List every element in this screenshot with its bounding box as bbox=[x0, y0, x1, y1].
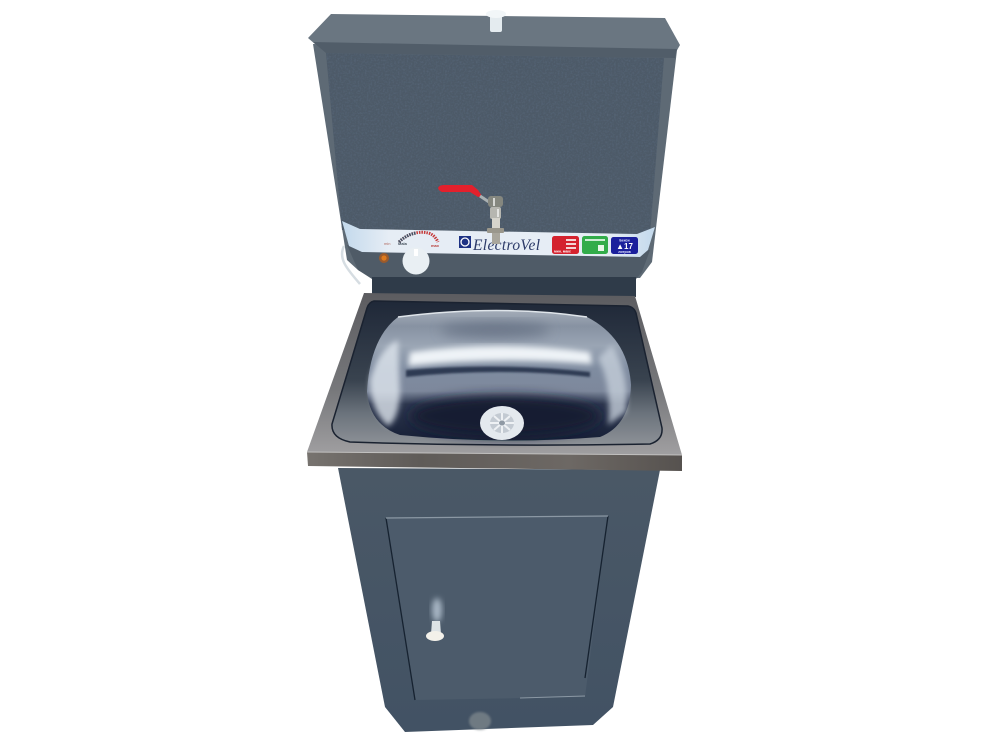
sink top rim bbox=[307, 293, 682, 455]
filler cap bbox=[486, 10, 506, 32]
red badge: мин. макс bbox=[554, 250, 571, 254]
lower panel strip bbox=[347, 245, 650, 279]
base scuff bbox=[469, 712, 491, 730]
temperature knob bbox=[402, 248, 430, 274]
temperature scale bbox=[384, 232, 440, 248]
bowl reflections bbox=[370, 310, 627, 436]
temperature scale: min bbox=[384, 241, 390, 246]
power cord bbox=[342, 246, 360, 284]
indicator lamp bbox=[379, 253, 389, 263]
red badge bbox=[552, 236, 579, 254]
blue badge: ▲17 bbox=[616, 242, 633, 251]
tank side frame bbox=[313, 44, 677, 278]
sink front edge bbox=[307, 452, 682, 471]
drain bbox=[480, 406, 524, 440]
cabinet body bbox=[338, 468, 660, 732]
temperature scale: Mala bbox=[398, 241, 408, 246]
dark neck bbox=[372, 277, 636, 297]
blue badge bbox=[611, 237, 638, 254]
door shadow lines bbox=[386, 516, 608, 700]
green badge bbox=[582, 236, 608, 254]
logo and brand name: ElectroVel bbox=[472, 237, 540, 254]
tank lid front edge bbox=[313, 42, 677, 58]
cabinet bbox=[338, 468, 660, 732]
door reflection bbox=[432, 598, 442, 622]
temperature scale: max bbox=[431, 243, 440, 248]
tank lid bbox=[308, 14, 680, 52]
sink bbox=[307, 293, 682, 471]
door knob bbox=[426, 621, 444, 641]
cabinet door bbox=[386, 516, 608, 700]
blue badge: литров bbox=[618, 250, 632, 254]
sink recess bbox=[332, 301, 662, 445]
tank front panel bbox=[326, 53, 664, 235]
label band bbox=[342, 221, 655, 257]
water tank bbox=[308, 10, 680, 297]
sink bowl bbox=[367, 310, 631, 441]
water tap bbox=[438, 185, 504, 244]
blue badge: Бекси bbox=[619, 238, 630, 242]
